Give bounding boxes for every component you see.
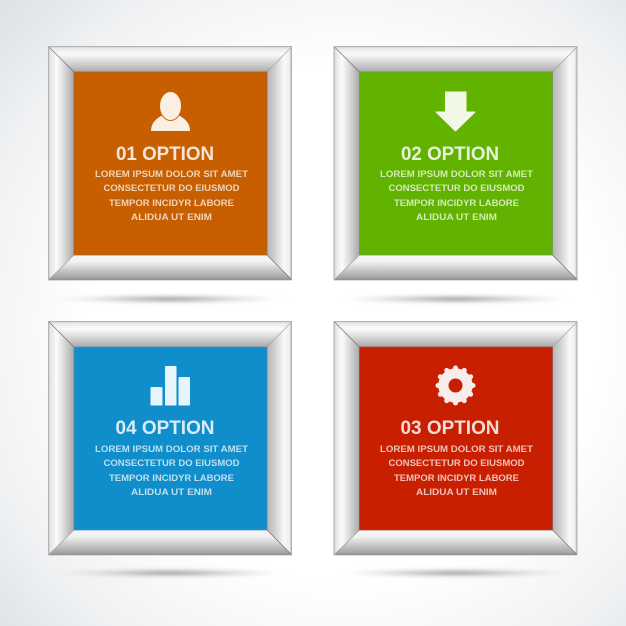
body text 01: LOREM IPSUM DOLOR SIT AMET [95, 169, 248, 180]
body text 02: LOREM IPSUM DOLOR SIT AMET [380, 169, 533, 180]
body text 01: TEMPOR INCIDYR LABORE [109, 198, 235, 209]
body text 04: CONSECTETUR DO EIUSMOD [104, 458, 240, 469]
body text 03: ALIDUA UT ENIM [416, 487, 497, 498]
body text 02: ALIDUA UT ENIM [416, 212, 497, 223]
body text 03 [380, 444, 533, 498]
body text 01: CONSECTETUR DO EIUSMOD [104, 183, 240, 194]
body text 04: TEMPOR INCIDYR LABORE [109, 473, 235, 484]
body text 02 [380, 169, 533, 223]
body text 03: CONSECTETUR DO EIUSMOD [388, 458, 525, 469]
colour field 02 [360, 72, 552, 255]
floor shadows [52, 294, 574, 578]
frame 03 [334, 321, 578, 555]
colour field 04 [74, 347, 267, 530]
body text 01 [95, 169, 248, 223]
icon: gear [438, 368, 473, 403]
body text 03: LOREM IPSUM DOLOR SIT AMET [380, 444, 533, 455]
body text 01: ALIDUA UT ENIM [131, 212, 212, 223]
heading 01: 01 OPTION [116, 144, 214, 165]
body text 04: LOREM IPSUM DOLOR SIT AMET [95, 444, 248, 455]
icon: bar chart [150, 366, 190, 406]
frame 02 [334, 46, 578, 280]
frame 04 [48, 321, 292, 555]
icon: down arrow [436, 92, 475, 131]
panel: 02 option [334, 46, 578, 280]
body text 04: ALIDUA UT ENIM [131, 487, 212, 498]
colour field 03 [360, 347, 552, 530]
frame 01 [48, 46, 292, 280]
panel: 01 option [48, 46, 292, 280]
body text 02: CONSECTETUR DO EIUSMOD [388, 183, 525, 194]
heading 02: 02 OPTION [401, 144, 499, 165]
heading 03: 03 OPTION [400, 418, 500, 439]
heading 04: 04 OPTION [116, 418, 214, 439]
icon: person [151, 92, 190, 131]
body text 02: TEMPOR INCIDYR LABORE [394, 198, 520, 209]
panel: 03 option [334, 321, 578, 555]
panel: 04 option [48, 321, 292, 555]
body text 03: TEMPOR INCIDYR LABORE [394, 473, 520, 484]
colour field 01 [74, 72, 267, 255]
body text 04 [95, 444, 248, 498]
